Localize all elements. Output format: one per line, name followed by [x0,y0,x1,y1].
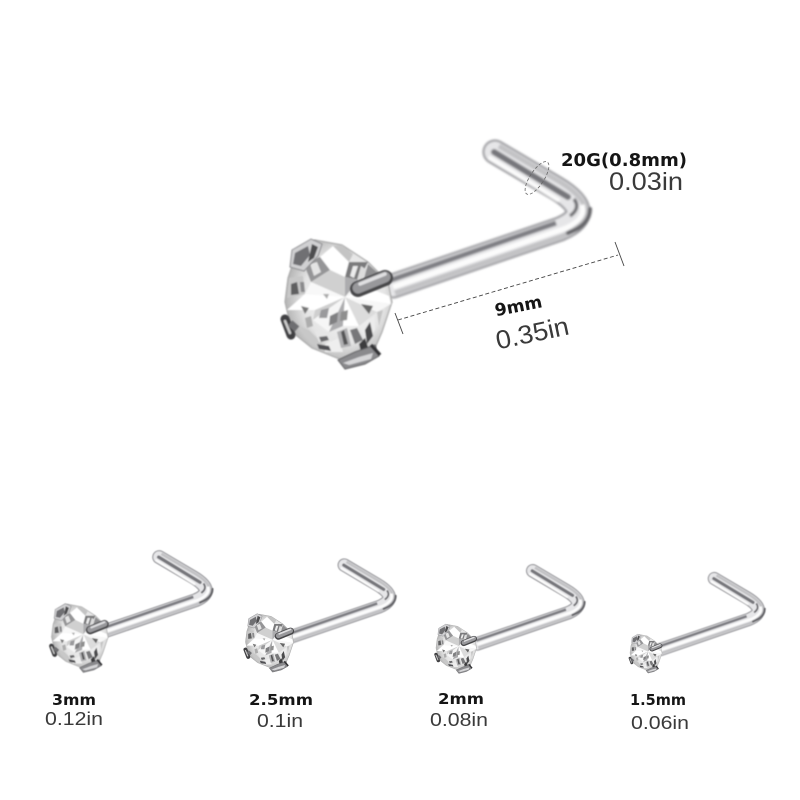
length label: 9mm / 0.35in [493,292,572,355]
icon: 2.5mm gem [246,614,294,672]
icon: main round-cut gem with prongs [285,239,392,369]
size option: 3mm pin [45,554,212,729]
label: 2mm: 0.08in [430,710,488,730]
dimension line: 9mm length [395,242,624,334]
length label: 9mm / 0.35in: 9mm [493,292,544,321]
gauge label: 20G: 0.03in [609,168,683,196]
label: 1.5mm [630,691,689,733]
label: 2.5mm: 0.1in [257,711,303,731]
length label: 9mm / 0.35in: 0.35in [493,311,572,355]
icon: 2mm rod [476,568,585,648]
icon: 1.5mm rod [659,575,765,653]
label: 3mm [45,691,103,729]
gauge marker: dashed ring around pin end [521,158,553,198]
size option: 2.5mm pin [246,562,396,731]
label: 1.5mm: 0.06in [631,713,689,733]
label: 2mm: 2mm [438,690,484,708]
icon: 3mm gem [52,604,108,673]
label: 1.5mm: 1.5mm [630,691,686,709]
label: 3mm: 3mm [52,691,96,709]
label: 3mm: 0.12in [45,709,103,729]
icon: 1.5mm gem [630,634,662,673]
size option: 2mm pin [430,568,585,730]
icon: 2mm gem [436,624,477,673]
gauge label: 20G: 20G(0.8mm) [561,151,687,171]
icon: 3mm rod [101,554,212,636]
label: 2.5mm: 2.5mm [249,691,313,709]
gauge label: 20G [561,151,687,196]
icon: main L-shaped rod [391,146,590,293]
icon: 2.5mm rod [288,562,396,641]
main nose pin: 9mm rod with 3mm gem [285,146,590,369]
label: 2mm [430,690,488,730]
label: 2.5mm [249,691,313,731]
size option: 1.5mm pin [630,575,765,733]
